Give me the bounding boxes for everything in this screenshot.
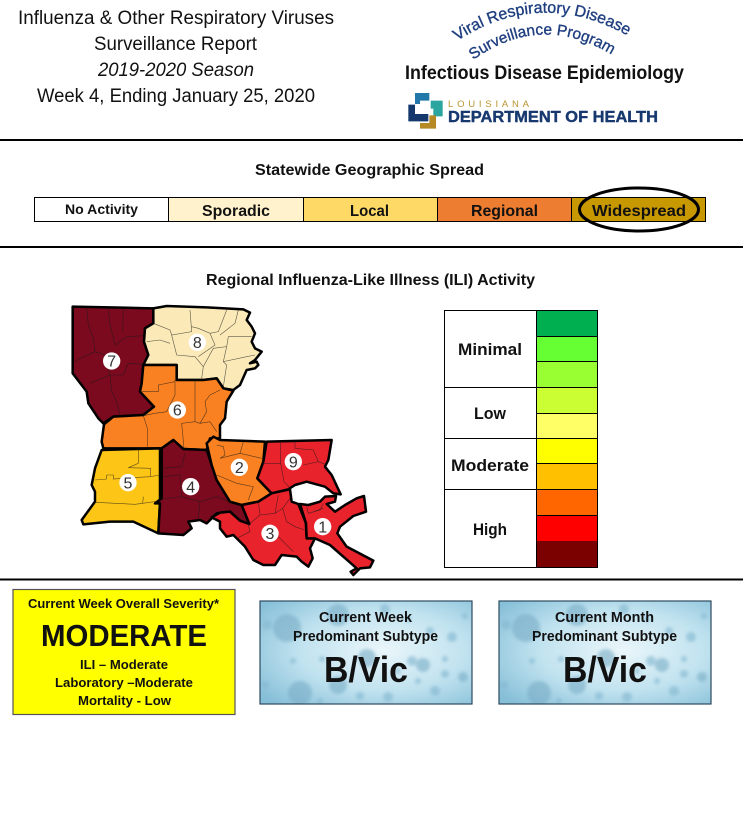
icon: Louisiana Department of Health cross: [408, 93, 443, 129]
geographic spread scale: Sporadic: [202, 203, 270, 220]
ILI activity legend: Minimal: [458, 341, 522, 359]
region 5: 5: [124, 475, 133, 492]
region 4: [155, 440, 249, 535]
panel: current week predominant subtype: Predominant Subtype: [293, 629, 438, 645]
report title block: [18, 8, 334, 107]
region 1: 1: [318, 519, 327, 536]
report title block: Influenza & Other Respiratory Viruses: [18, 8, 334, 29]
ILI activity legend: Low: [474, 405, 506, 423]
department name: LOUISIANA: [448, 99, 530, 110]
report title block: 2019-2020 Season: [97, 60, 254, 81]
ILI activity legend: Moderate: [451, 457, 529, 475]
ILI activity legend: High: [473, 521, 507, 539]
region 9: 9: [289, 454, 298, 471]
panel: current month predominant subtype: [499, 601, 711, 705]
report title block: Surveillance Report: [94, 34, 258, 55]
panel: overall severity: MODERATE: [41, 618, 207, 653]
region 3: 3: [266, 526, 275, 543]
organisation heading: Infectious Disease Epidemiology: [405, 63, 684, 84]
region 7: 7: [107, 354, 116, 371]
region 2: 2: [235, 460, 244, 477]
geographic spread scale: Regional: [471, 203, 538, 220]
panel: overall severity: Current Week Overall Severity*: [28, 596, 220, 611]
panel: overall severity: ILI – Moderate: [80, 657, 168, 672]
department name: [448, 99, 658, 126]
panel: overall severity: Laboratory –Moderate: [55, 675, 193, 690]
region 8: 8: [193, 335, 202, 352]
geographic spread scale: No Activity: [65, 202, 139, 217]
panel: overall severity: Mortality - Low: [78, 693, 172, 708]
ILI activity legend: [444, 310, 598, 568]
region 1: [300, 496, 373, 575]
region 4: 4: [186, 479, 195, 496]
program logo: curved text: Surveillance Program: [469, 24, 614, 58]
panel: current month predominant subtype: B/Vic: [563, 649, 647, 690]
panel: current week predominant subtype: [260, 601, 472, 705]
geographic spread scale: Widespread: [592, 203, 686, 220]
region 9: [257, 440, 341, 494]
region 7: [73, 307, 154, 423]
panel: current week predominant subtype: B/Vic: [324, 649, 408, 690]
region 6: [102, 365, 233, 450]
panel: current month predominant subtype: Predominant Subtype: [532, 629, 677, 645]
region 5: [82, 448, 160, 533]
region 6: 6: [173, 403, 182, 420]
report title block: Week 4, Ending January 25, 2020: [37, 86, 315, 107]
panel: current week predominant subtype: Current Week: [319, 610, 413, 626]
Louisiana regional map: [73, 306, 373, 575]
region 2: [207, 437, 272, 505]
region 8: [143, 306, 262, 390]
panel: current month predominant subtype: Current Month: [555, 610, 654, 626]
program logo: curved text: Viral Respiratory Disease: [451, 2, 630, 39]
region 3: [212, 489, 315, 567]
department name: DEPARTMENT OF HEALTH: [448, 109, 658, 126]
panel: overall severity: [13, 590, 235, 714]
geographic spread scale: Local: [350, 203, 389, 220]
heading: geographic spread: Statewide Geographic Spread: [255, 162, 484, 179]
geographic spread scale: [34, 198, 706, 222]
callout: widespread circled: [580, 188, 698, 231]
heading: regional ILI activity: Regional Influenza-Like Illness (ILI) Activity: [206, 272, 535, 289]
